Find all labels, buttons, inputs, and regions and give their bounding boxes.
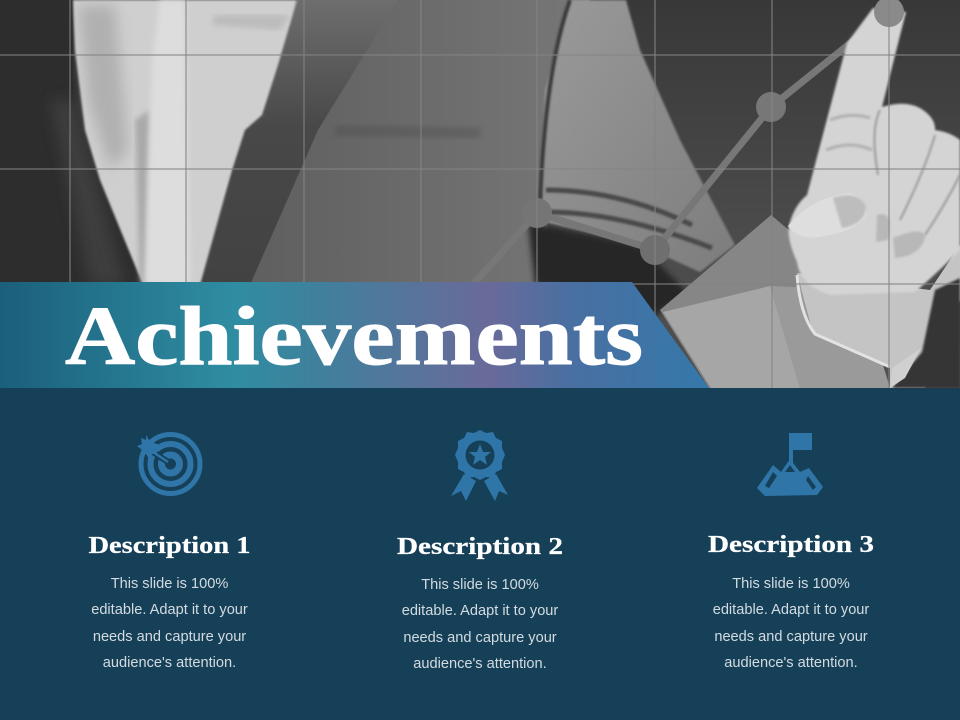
heading: Description 2: [397, 534, 563, 560]
body text: [402, 577, 558, 672]
body text: editable. Adapt it to your: [402, 603, 558, 619]
icon: award ribbon: [451, 430, 508, 501]
shirt cuff: [797, 245, 960, 388]
heading: Description 3: [708, 532, 874, 558]
body text: This slide is 100%: [421, 577, 539, 593]
icon: target: [137, 434, 200, 494]
body text: [713, 576, 869, 671]
panel: description 1: [88, 434, 250, 671]
body text: needs and capture your: [714, 629, 868, 645]
body text: needs and capture your: [93, 629, 246, 645]
body text: This slide is 100%: [732, 576, 850, 592]
icon: mountain flag: [757, 433, 823, 496]
title banner: [0, 282, 709, 388]
photo: businessman pointing at a chart: [0, 0, 960, 388]
body text: audience's attention.: [413, 656, 547, 672]
body text: needs and capture your: [403, 630, 557, 646]
panel: description 3: [708, 433, 874, 671]
chart line: [470, 12, 889, 288]
body text: This slide is 100%: [111, 576, 228, 592]
title: Achievements: [65, 290, 643, 383]
panel: description 2: [397, 430, 563, 672]
body text: [91, 576, 248, 671]
sleeve: [540, 0, 735, 272]
body text: audience's attention.: [724, 655, 858, 671]
dark suit at right edge: [892, 278, 960, 388]
heading: Description 1: [88, 533, 250, 559]
diamond and lower sleeve: [660, 215, 890, 388]
dark shadow under arm: [528, 222, 690, 340]
body text: audience's attention.: [103, 655, 236, 671]
chart grid: [0, 0, 960, 388]
body text: editable. Adapt it to your: [91, 602, 248, 618]
hand: [789, 8, 960, 295]
body text: editable. Adapt it to your: [713, 602, 869, 618]
